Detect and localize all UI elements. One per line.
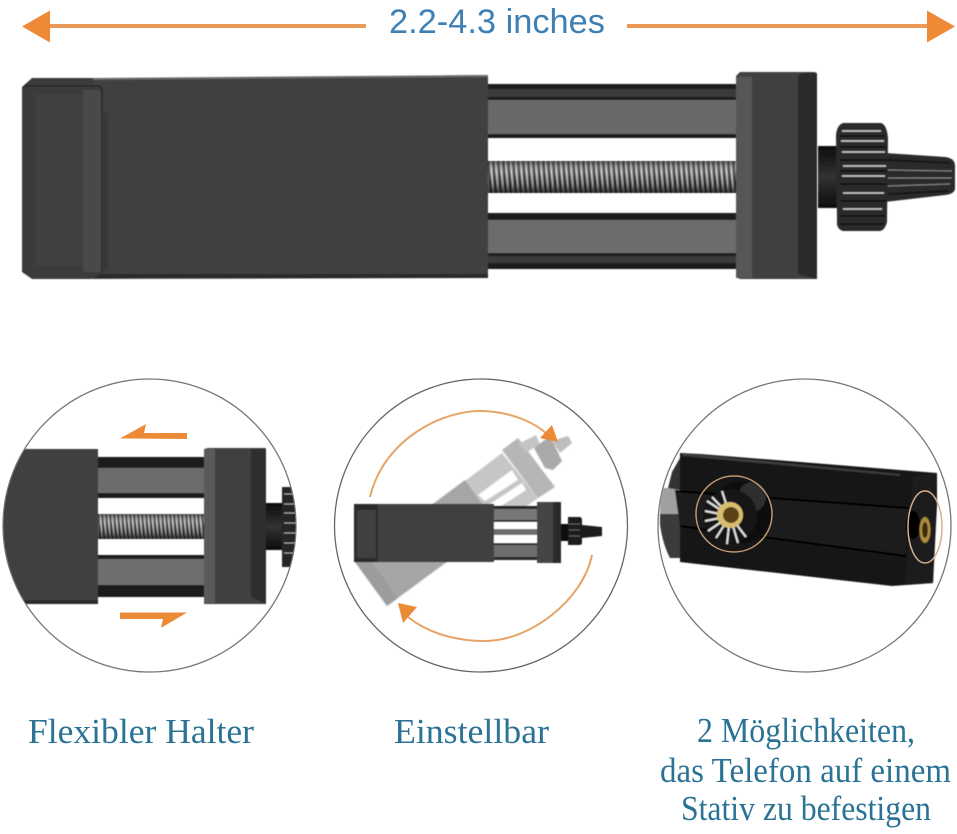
- side screw hole: [906, 511, 930, 543]
- dimension arrow: right: [627, 10, 955, 42]
- brass insert: [703, 481, 772, 544]
- angled holder block: [660, 453, 937, 586]
- highlight ring: side hole: [908, 491, 942, 563]
- detail circle: flexible holder: [0, 379, 300, 672]
- highlight ring: brass insert: [696, 476, 772, 552]
- arrow left: [120, 424, 187, 439]
- caption: mounting options: 2 Möglichkeiten,: [697, 711, 915, 750]
- caption: mounting options: Stativ zu befestigen: [681, 789, 931, 828]
- rails and screw: [488, 84, 738, 269]
- right end block: [736, 72, 817, 279]
- detail circle: adjustable: [334, 379, 628, 672]
- phone holder main view: [22, 72, 955, 279]
- sliding jaw body: [93, 75, 488, 279]
- rotation arrowhead upper: [540, 425, 558, 442]
- front holder: [354, 502, 602, 563]
- caption: mounting options: [660, 711, 951, 828]
- caption: flexible holder: Flexibler Halter: [28, 712, 254, 751]
- adjustment knob: [818, 123, 955, 231]
- rotation arrowhead lower: [398, 603, 417, 623]
- left end cap: [22, 78, 108, 279]
- arrow right: [120, 612, 187, 628]
- caption: adjustable: Einstellbar: [394, 712, 549, 751]
- cropped holder: [0, 448, 300, 604]
- dimension arrow: left: [22, 10, 366, 42]
- detail circle: mounting options: [658, 379, 951, 672]
- dimension label: 2.2-4.3 inches: [389, 3, 605, 41]
- rotation arc lower: [408, 555, 592, 641]
- rotation arc upper: [370, 411, 547, 497]
- ghost rotated holder: [355, 435, 572, 606]
